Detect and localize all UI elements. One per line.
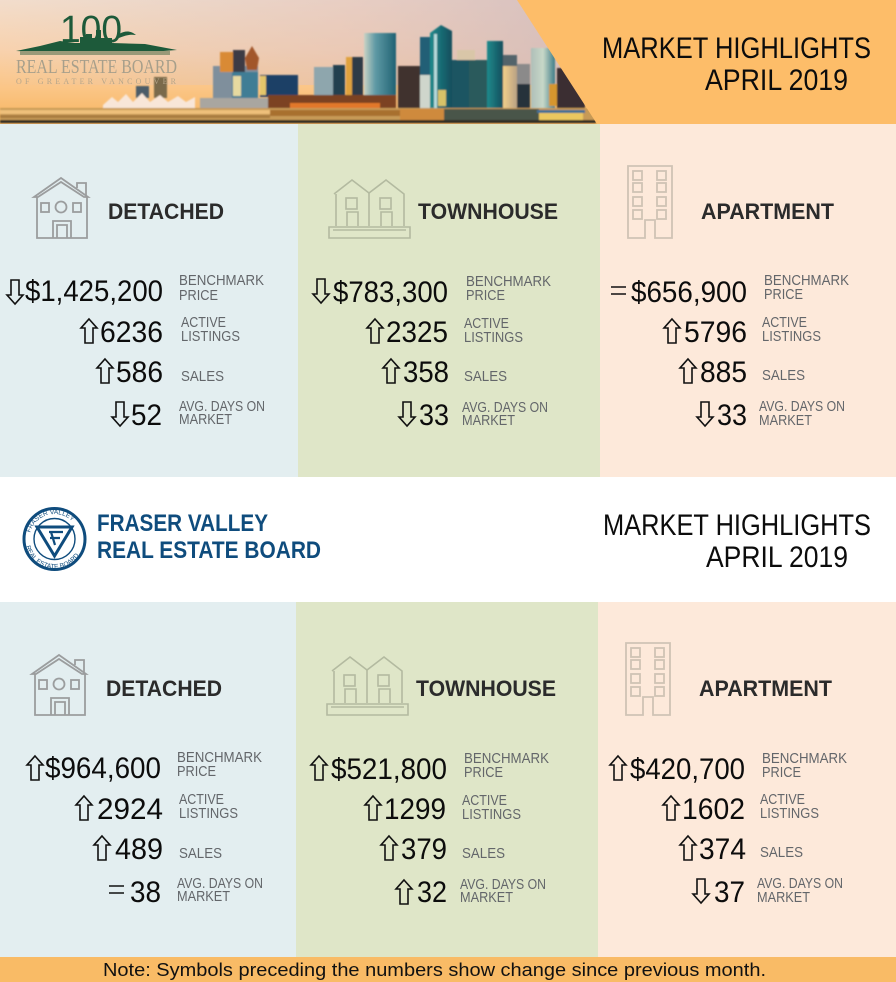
row: sales — [97, 356, 224, 389]
panel: Fraser Valley apartment — [598, 602, 896, 957]
skyline buildings — [0, 25, 596, 123]
heading: detached: DETACHED — [108, 199, 224, 224]
row: benchmark price: PRICE — [179, 287, 218, 304]
row: benchmark price: PRICE — [466, 287, 505, 304]
logo: Fraser Valley Real Estate Board: REAL ESTATE BOARD — [97, 537, 321, 564]
row: average days on market: AVG. DAYS ON — [757, 875, 843, 892]
row: average days on market: 52 — [131, 399, 162, 432]
header title — [602, 32, 871, 97]
heading: townhouse: TOWNHOUSE — [418, 199, 558, 224]
icon: townhouse — [329, 180, 410, 238]
row: average days on market: MARKET — [460, 889, 513, 906]
row: average days on market: MARKET — [757, 889, 810, 906]
row: active listings — [81, 314, 240, 349]
row: active listings — [365, 792, 521, 826]
row: average days on market: 37 — [714, 876, 745, 909]
row: average days on market: AVG. DAYS ON — [179, 398, 265, 415]
row: average days on market: MARKET — [462, 412, 515, 429]
row: active listings — [367, 315, 523, 349]
row: active listings: LISTINGS — [760, 805, 819, 822]
row: active listings: LISTINGS — [179, 805, 238, 822]
row: active listings: 6236 — [100, 316, 163, 349]
footer note — [0, 957, 896, 982]
row: active listings — [76, 791, 238, 826]
logo: Fraser Valley Real Estate Board: FRASER VALLEY — [26, 510, 74, 532]
heading: apartment: APARTMENT — [699, 676, 833, 701]
row: sales — [383, 356, 507, 389]
row: benchmark price — [610, 750, 847, 786]
row: benchmark price: $656,900 — [631, 276, 747, 309]
row: active listings: 1299 — [384, 793, 446, 826]
row: benchmark price: BENCHMARK — [762, 750, 847, 767]
heading: apartment: APARTMENT — [701, 199, 835, 224]
row: benchmark price: BENCHMARK — [464, 750, 549, 767]
row: sales — [381, 833, 505, 866]
row: sales: SALES — [762, 367, 805, 384]
panel: Vancouver apartment — [600, 124, 896, 477]
row: benchmark price: $420,700 — [630, 753, 745, 786]
row: active listings: ACTIVE — [762, 314, 807, 331]
row: benchmark price — [7, 272, 264, 308]
logo: Fraser Valley Real Estate Board — [22, 507, 321, 571]
row: benchmark price — [611, 272, 849, 309]
row: sales: 885 — [700, 356, 747, 389]
row: average days on market: MARKET — [179, 411, 232, 428]
logo: Real Estate Board of Greater Vancouver: 100 — [60, 9, 122, 51]
row: sales: SALES — [181, 368, 224, 385]
row: sales: 379 — [401, 833, 447, 866]
logo: Fraser Valley Real Estate Board: REAL ESTATE BOARD — [26, 545, 78, 568]
row: benchmark price: $964,600 — [45, 752, 161, 785]
row: active listings: LISTINGS — [464, 329, 523, 346]
row: active listings: 2325 — [386, 316, 448, 349]
row: benchmark price: $521,800 — [331, 753, 447, 786]
Fraser Valley title — [603, 509, 871, 574]
icon: detached house — [32, 655, 86, 715]
row: benchmark price: BENCHMARK — [177, 749, 262, 766]
row: average days on market — [112, 398, 265, 432]
row: average days on market: AVG. DAYS ON — [759, 398, 845, 415]
row: average days on market: AVG. DAYS ON — [462, 399, 548, 416]
row: active listings — [664, 314, 821, 349]
row: active listings: ACTIVE — [181, 314, 226, 331]
icon: townhouse — [327, 657, 408, 715]
row: sales: 374 — [699, 833, 746, 866]
Fraser Valley title: APRIL 2019 — [706, 541, 848, 574]
row: benchmark price — [311, 750, 549, 786]
row: benchmark price: PRICE — [764, 286, 803, 303]
row: benchmark price: BENCHMARK — [466, 273, 551, 290]
row: sales: SALES — [464, 368, 507, 385]
header title: APRIL 2019 — [705, 64, 848, 97]
icon: apartment — [628, 166, 672, 238]
row: active listings — [663, 791, 819, 826]
row: benchmark price: BENCHMARK — [764, 272, 849, 289]
row: active listings: ACTIVE — [462, 792, 507, 809]
row: sales — [94, 833, 222, 866]
row: benchmark price — [27, 749, 262, 785]
row: sales: SALES — [760, 844, 803, 861]
row: benchmark price: PRICE — [177, 763, 216, 780]
row: active listings: LISTINGS — [181, 328, 240, 345]
row: average days on market: 38 — [130, 876, 161, 909]
row: benchmark price: $1,425,200 — [25, 275, 163, 308]
row: benchmark price: BENCHMARK — [179, 272, 264, 289]
row: sales — [680, 833, 803, 866]
row: sales: SALES — [179, 845, 222, 862]
row: sales: 489 — [115, 833, 163, 866]
row: active listings: LISTINGS — [762, 328, 821, 345]
row: active listings: LISTINGS — [462, 806, 521, 823]
row: average days on market — [693, 875, 843, 909]
row: average days on market: 33 — [717, 399, 747, 432]
row: benchmark price: PRICE — [464, 764, 503, 781]
header banner: Vancouver skyline — [0, 0, 896, 124]
icon: apartment — [626, 643, 670, 715]
row: average days on market: AVG. DAYS ON — [177, 875, 263, 892]
row: active listings: 5796 — [684, 316, 747, 349]
row: average days on market — [399, 399, 548, 432]
icon: detached house — [34, 178, 88, 238]
row: sales: 586 — [116, 356, 163, 389]
row: average days on market: AVG. DAYS ON — [460, 876, 546, 893]
row: benchmark price: PRICE — [762, 764, 801, 781]
panel: Fraser Valley townhouse — [296, 602, 598, 957]
orange title banner — [517, 0, 896, 124]
row: average days on market: MARKET — [177, 888, 230, 905]
footer note: Note: Symbols preceding the numbers show change since previous month. — [103, 960, 766, 980]
row: average days on market — [697, 398, 845, 432]
row: benchmark price — [313, 273, 551, 309]
heading: detached: DETACHED — [106, 676, 222, 701]
logo: Real Estate Board of Greater Vancouver — [16, 9, 177, 86]
row: average days on market — [396, 876, 546, 909]
row: average days on market: 32 — [417, 876, 447, 909]
panel: Fraser Valley detached — [0, 602, 296, 957]
row: sales: SALES — [462, 845, 505, 862]
row: active listings: ACTIVE — [179, 791, 224, 808]
row: sales: 358 — [403, 356, 449, 389]
row: active listings: 2924 — [97, 793, 163, 826]
heading: townhouse: TOWNHOUSE — [416, 676, 556, 701]
row: active listings: ACTIVE — [760, 791, 805, 808]
logo: Real Estate Board of Greater Vancouver: REAL ESTATE BOARD — [16, 56, 177, 78]
logo: Fraser Valley Real Estate Board: FRASER VALLEY — [97, 510, 268, 537]
row: active listings: ACTIVE — [464, 315, 509, 332]
panel: Vancouver townhouse — [298, 124, 600, 477]
row: average days on market: 33 — [419, 399, 449, 432]
row: benchmark price: $783,300 — [333, 276, 448, 309]
logo: Real Estate Board of Greater Vancouver: OF GREATER VANCOUVER — [16, 77, 177, 86]
panel: Vancouver detached — [0, 124, 298, 477]
row: average days on market — [109, 875, 263, 909]
row: active listings: 1602 — [682, 793, 745, 826]
row: sales — [680, 356, 805, 389]
row: average days on market: MARKET — [759, 412, 812, 429]
